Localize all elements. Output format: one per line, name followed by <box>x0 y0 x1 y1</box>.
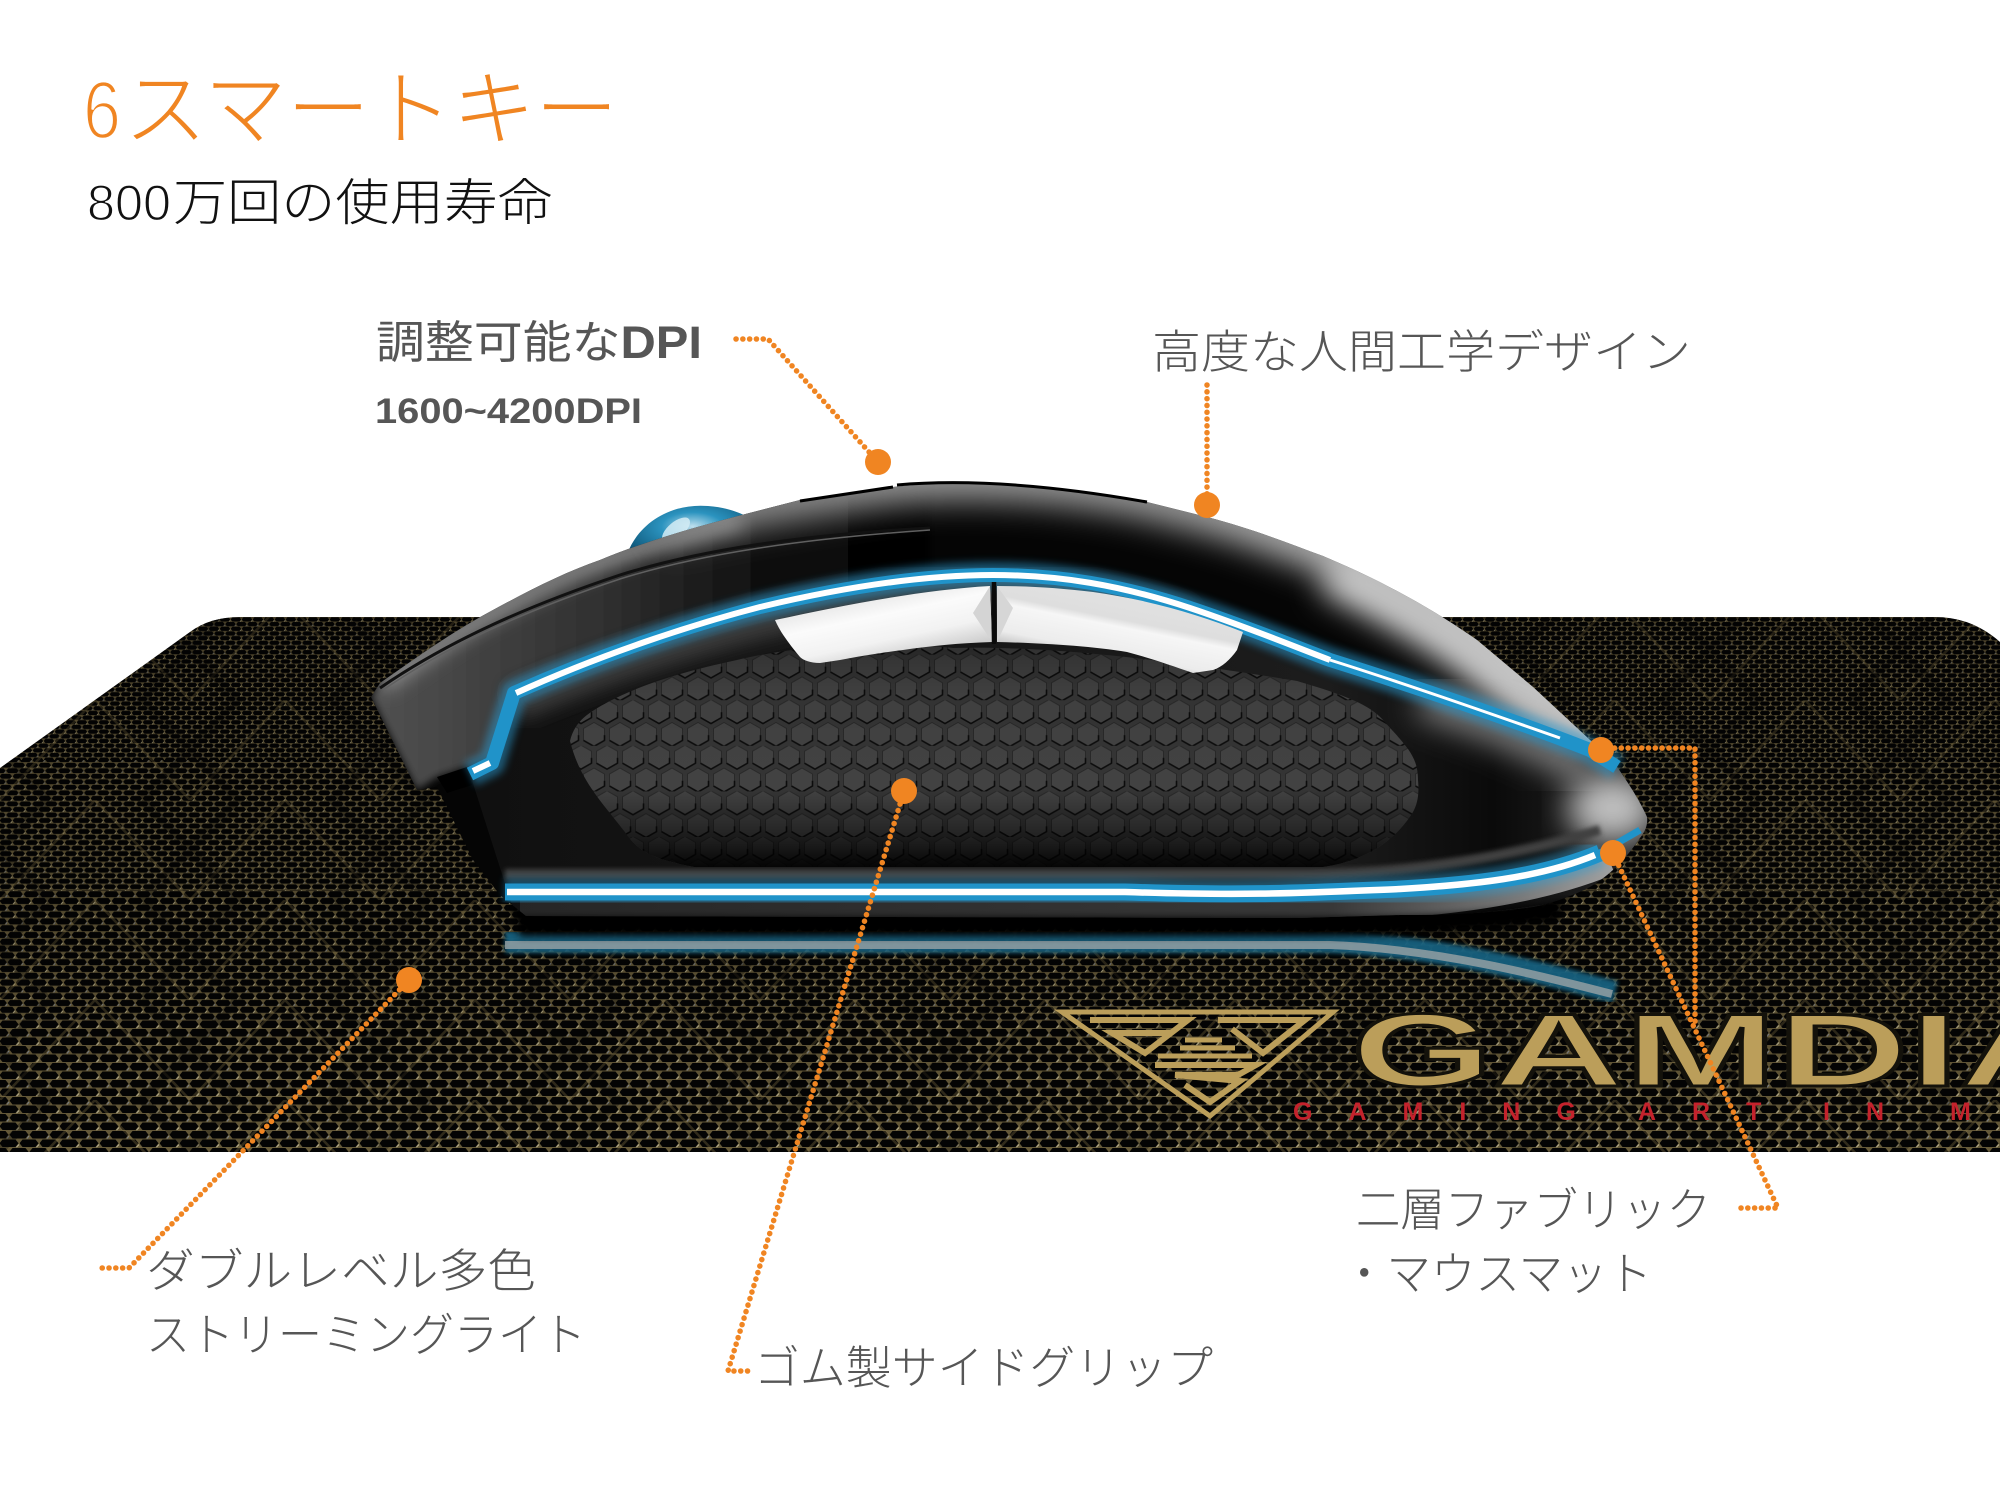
shell rim highlight: left <box>380 517 740 683</box>
callout: two-layer fabric mouse pad <box>1356 840 1778 1236</box>
side button: left <box>775 586 992 663</box>
rear black slot <box>437 767 468 782</box>
callout: two-layer fabric line to strip <box>1588 737 1695 1022</box>
shell base <box>371 483 1647 918</box>
side button: right <box>997 586 1243 673</box>
band below grip <box>505 830 1600 874</box>
label: streaming light: ストリーミングライト <box>146 1309 586 1361</box>
icon: blue scroll wheel <box>628 506 757 565</box>
label: mouse mat: ・マウスマット <box>1342 1248 1652 1300</box>
label: double level multicolor: ダブルレベル多色 <box>146 1245 536 1297</box>
logo: GAMDIA emblem and wordmark on pad <box>1054 1010 2000 1120</box>
rubber side grip <box>570 644 1418 867</box>
label: DPI range: 1600~4200DPI <box>375 392 642 431</box>
logo tagline: ART <box>1638 1098 1797 1126</box>
callout: rubber side grip <box>728 778 1213 1394</box>
side button divider <box>992 582 996 644</box>
band below strip <box>520 862 1610 908</box>
callout: double-level multicolor light <box>99 967 536 1297</box>
logo tagline: GAMING <box>1293 1098 1612 1126</box>
logo wordmark: GAMDIA <box>1351 993 2000 1109</box>
mouse body <box>371 478 1660 930</box>
label: ergonomic design: 高度な人間工学デザイン <box>1152 326 1691 378</box>
logo tagline: IN <box>1823 1098 1920 1126</box>
callout: ergonomic design <box>1152 326 1691 518</box>
label: rubber grip: ゴム製サイドグリップ <box>754 1342 1213 1394</box>
lower side panel <box>472 606 1648 911</box>
label: adjustable DPI: 調整可能な DPI <box>376 317 702 368</box>
label: two-layer fabric: 二層ファブリック <box>1356 1184 1711 1236</box>
logo emblem triangle <box>1062 1012 1333 1116</box>
title: スマートキー <box>124 65 618 156</box>
glow shading along strip <box>514 590 1190 705</box>
title: 6 <box>83 65 121 156</box>
mouse reflection on pad <box>505 942 1615 994</box>
top edge buttons sliver <box>800 483 1147 502</box>
rear shell <box>371 500 800 790</box>
subtitle: 万回の使用寿命 <box>173 175 552 231</box>
mouse shadow <box>510 895 1560 936</box>
shell rim highlight: top and right <box>660 478 1625 765</box>
nose highlight <box>1568 774 1656 842</box>
mouse pad <box>0 610 2000 1155</box>
blue light strip: upper <box>470 575 1617 774</box>
shell seam <box>380 528 930 688</box>
callout: adjustable DPI <box>376 317 891 475</box>
blue light strip: lower <box>505 830 1640 894</box>
subtitle: 800 <box>87 175 171 231</box>
